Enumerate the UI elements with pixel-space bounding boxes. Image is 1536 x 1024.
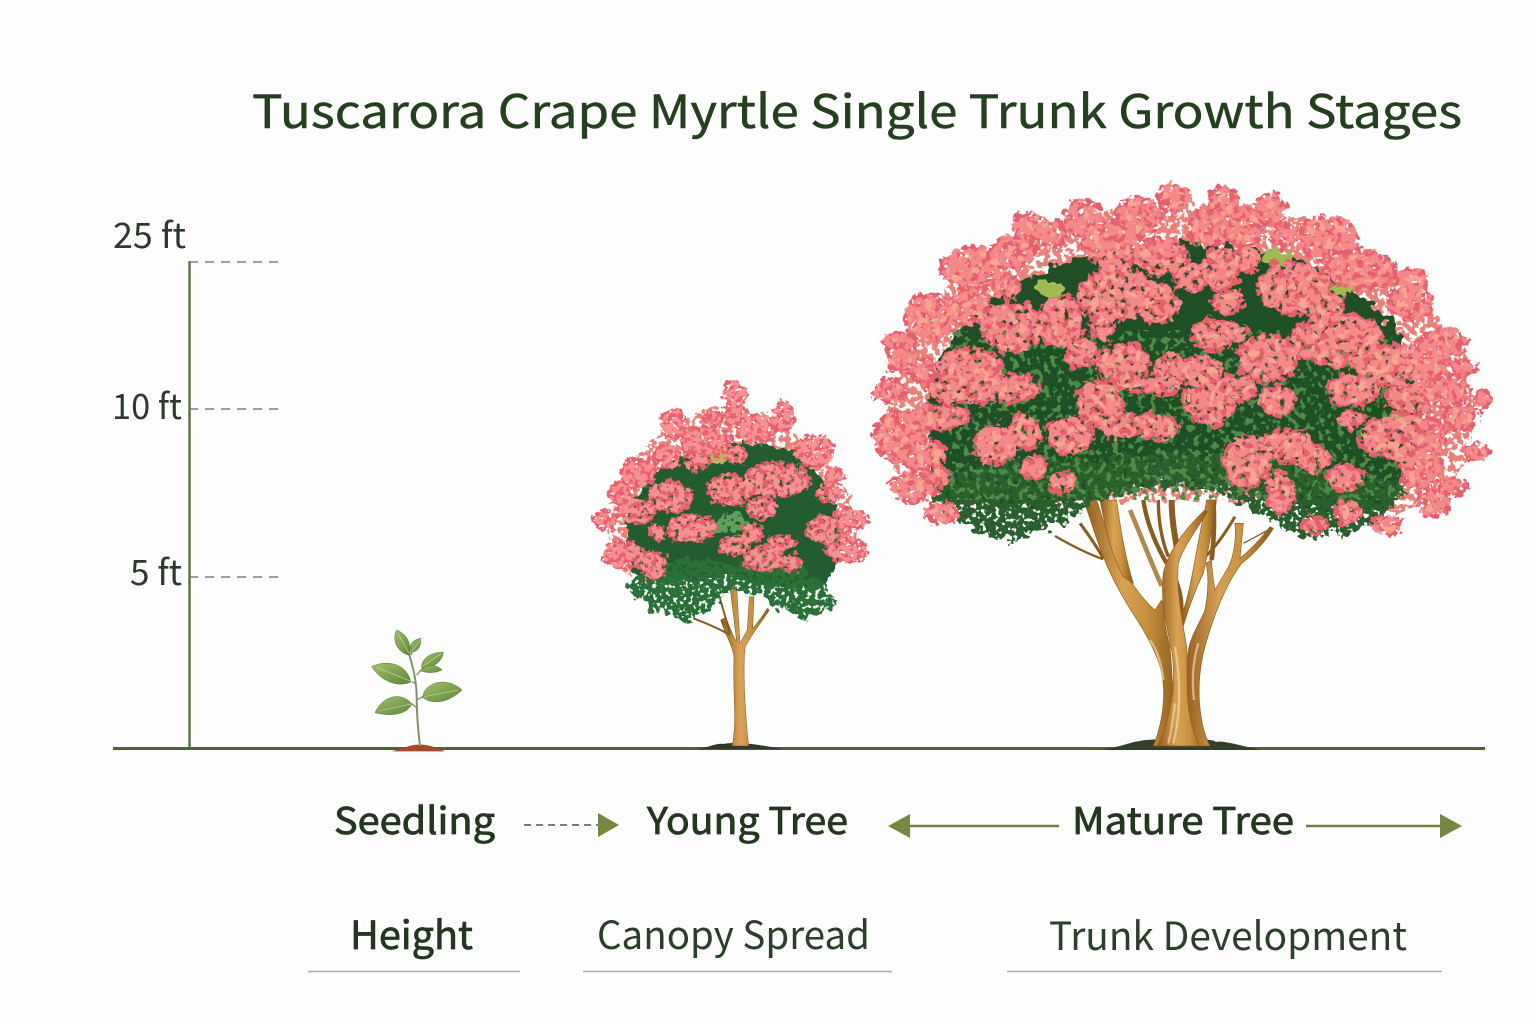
- seedling leaves: [372, 630, 462, 715]
- arrow: mature tree span left: [888, 814, 1059, 838]
- young tree blossoms: [596, 384, 865, 577]
- mature tree soil: [1100, 739, 1262, 750]
- axis label: 5 ft: 5 ft: [130, 545, 182, 596]
- young tree illustration: [596, 384, 865, 749]
- mature tree blossoms: [877, 185, 1487, 532]
- metric: Height: Height: [350, 905, 473, 961]
- young tree trunk: [693, 587, 769, 746]
- metric: Trunk Development: Trunk Development: [1049, 906, 1407, 962]
- young tree foliage: [625, 442, 840, 588]
- axis label: 10 ft: 10 ft: [112, 379, 182, 430]
- trunk highlights: [1150, 640, 1198, 743]
- stage label: Seedling: Seedling: [334, 791, 495, 845]
- arrow: seedling to young tree: [524, 813, 619, 837]
- title: Tuscarora Crape Myrtle Single Trunk Growth Stages: [252, 76, 1462, 142]
- height axis: [112, 208, 280, 748]
- mature tree illustration: [877, 185, 1487, 750]
- mature tree blossom halo: [887, 203, 1474, 512]
- soil mound: [392, 745, 445, 751]
- axis label: 25 ft: 25 ft: [113, 208, 186, 259]
- metric: Canopy Spread: Canopy Spread: [597, 905, 870, 961]
- stage label: Mature Tree: Mature Tree: [1072, 791, 1294, 845]
- mature tree foliage: [925, 242, 1421, 511]
- stage label: Young Tree: Young Tree: [646, 791, 848, 845]
- young tree soil: [697, 743, 783, 749]
- young tree blossom halo: [605, 407, 854, 575]
- mature tree trunks: [1055, 500, 1273, 746]
- ground line: [113, 747, 1485, 750]
- seedling illustration: [372, 630, 462, 751]
- arrow: mature tree span right: [1306, 814, 1462, 838]
